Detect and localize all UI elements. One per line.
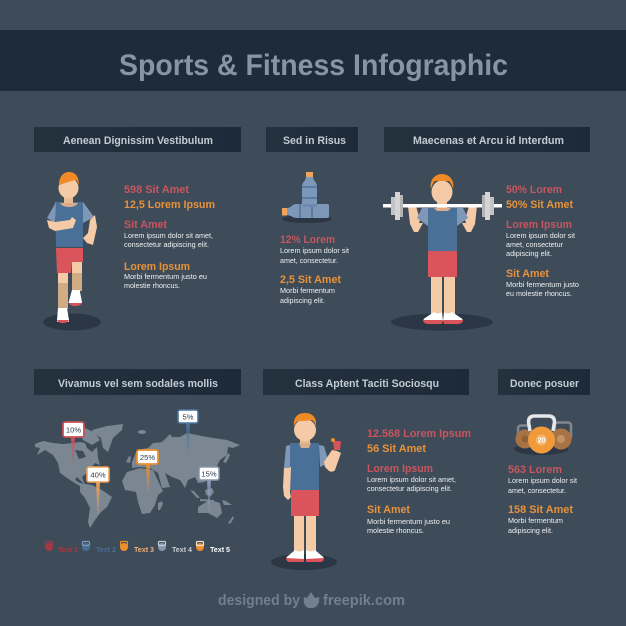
stats text: Sit Amet bbox=[506, 268, 549, 280]
stats text bbox=[506, 184, 579, 298]
stats text: 50% Sit Amet bbox=[506, 199, 573, 211]
stats text: molestie rhoncus. bbox=[367, 526, 424, 535]
icon: kettlebells: 20 bbox=[538, 438, 545, 444]
heading: Maecenas et Arcu id Interdum bbox=[413, 135, 564, 147]
panel: bottles bbox=[266, 127, 358, 305]
pin: 15%: 15% bbox=[201, 470, 217, 478]
title banner bbox=[0, 30, 626, 91]
stats text: 158 Sit Amet bbox=[508, 504, 573, 516]
stats text: Lorem ipsum dolor sit bbox=[506, 231, 575, 240]
legend item 4 bbox=[158, 542, 193, 554]
stats text: Lorem ipsum dolor sit amet, bbox=[124, 231, 213, 240]
stats text bbox=[367, 428, 471, 535]
stats text: Morbi fermentum bbox=[508, 516, 563, 525]
stats text: amet, consectetur. bbox=[508, 486, 566, 495]
stats text: Lorem ipsum dolor sit amet, bbox=[367, 475, 456, 484]
stats text: 2,5 Sit Amet bbox=[280, 274, 341, 286]
stats text: Lorem Ipsum bbox=[506, 219, 572, 231]
stats text: 12% Lorem bbox=[280, 234, 335, 246]
stats text: Morbi fermentum justo bbox=[506, 280, 579, 289]
pin: 25%: 25% bbox=[140, 453, 155, 462]
pin: 40%: 40% bbox=[90, 470, 106, 480]
heading: Aenean Dignissim Vestibulum bbox=[63, 135, 213, 147]
stats text bbox=[124, 184, 215, 290]
pin: 10% bbox=[63, 422, 84, 466]
stats text: Lorem ipsum dolor sit bbox=[280, 246, 349, 255]
stats text: 50% Lorem bbox=[506, 184, 562, 196]
stats text: 598 Sit Amet bbox=[124, 184, 189, 196]
heading bbox=[263, 369, 469, 395]
icon: water bottles bbox=[282, 172, 332, 223]
heading: Sed in Risus bbox=[283, 135, 346, 147]
heading: Class Aptent Taciti Sociosqu bbox=[295, 378, 439, 390]
heading bbox=[34, 369, 241, 395]
stats text: 563 Lorem bbox=[508, 464, 562, 476]
icon: freepik logo bbox=[304, 592, 319, 608]
legend item 5: Text 5 bbox=[210, 545, 230, 554]
legend item 1: Text 1 bbox=[58, 545, 78, 554]
footer credit bbox=[218, 592, 405, 609]
stats text: 12,5 Lorem Ipsum bbox=[124, 199, 215, 211]
stats text: molestie rhoncus. bbox=[124, 281, 180, 290]
stats text: adipiscing elit. bbox=[280, 296, 325, 305]
figure: person with drink bbox=[271, 413, 341, 570]
pin: 40% bbox=[87, 467, 109, 514]
stats text: adipiscing elit. bbox=[508, 526, 553, 535]
stats text: 12.568 Lorem Ipsum bbox=[367, 428, 471, 440]
panel: weightlifter bbox=[383, 127, 590, 330]
pin: 5% bbox=[178, 410, 198, 454]
legend item 5 bbox=[196, 542, 230, 554]
heading: Donec posuer bbox=[510, 378, 580, 390]
stats text: Lorem Ipsum bbox=[367, 463, 433, 475]
panel: kettlebells bbox=[498, 369, 590, 535]
world map bbox=[35, 424, 240, 528]
legend item 2 bbox=[82, 542, 116, 554]
stats text: Sit Amet bbox=[124, 219, 167, 231]
panel: runner bbox=[34, 127, 241, 330]
pin: 25% bbox=[137, 450, 158, 494]
stats text: consectetur adipiscing elit. bbox=[124, 240, 209, 249]
footer credit: designed by bbox=[218, 593, 300, 609]
heading bbox=[498, 369, 590, 395]
pin: 10%: 10% bbox=[66, 426, 81, 434]
legend bbox=[45, 542, 230, 554]
legend item 3 bbox=[120, 542, 154, 554]
stats text: Lorem Ipsum bbox=[124, 261, 190, 273]
legend item 2: Text 2 bbox=[96, 545, 116, 554]
title banner: Sports & Fitness Infographic bbox=[119, 49, 508, 82]
panel: world map bbox=[34, 369, 241, 554]
stats text bbox=[508, 464, 577, 535]
footer credit: freepik.com bbox=[323, 593, 405, 609]
panel: person with drink bbox=[263, 369, 471, 570]
stats text: Morbi fermentum justo eu bbox=[124, 272, 207, 281]
legend item 1 bbox=[45, 542, 78, 554]
stats text: Morbi fermentum justo eu bbox=[367, 517, 450, 526]
heading bbox=[266, 127, 358, 152]
figure: weightlifter bbox=[383, 174, 502, 330]
pin: 5%: 5% bbox=[183, 412, 194, 422]
stats text: amet, consectetur. bbox=[280, 256, 338, 265]
pin: 15% bbox=[199, 467, 219, 513]
stats text: Morbi fermentum bbox=[280, 286, 335, 295]
figure: runner bbox=[43, 172, 101, 330]
stats text: consectetur adipiscing elit. bbox=[367, 484, 452, 493]
legend item 4: Text 4 bbox=[172, 545, 193, 554]
stats text: amet, consectetur bbox=[506, 240, 564, 249]
icon: kettlebells bbox=[514, 416, 572, 455]
heading bbox=[384, 127, 590, 152]
stats text: 56 Sit Amet bbox=[367, 443, 426, 455]
heading bbox=[34, 127, 241, 152]
stats text bbox=[280, 234, 349, 305]
legend item 3: Text 3 bbox=[134, 545, 154, 554]
stats text: Lorem ipsum dolor sit bbox=[508, 476, 577, 485]
heading: Vivamus vel sem sodales mollis bbox=[58, 378, 218, 390]
stats text: Sit Amet bbox=[367, 504, 410, 516]
stats text: eu molestie rhoncus. bbox=[506, 289, 572, 298]
stats text: adipiscing elit. bbox=[506, 249, 552, 258]
